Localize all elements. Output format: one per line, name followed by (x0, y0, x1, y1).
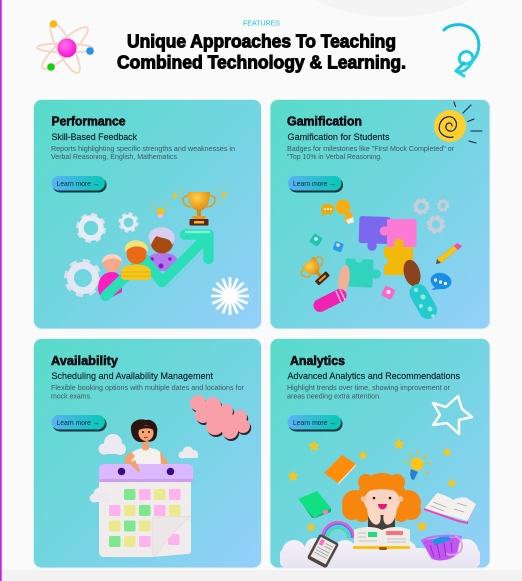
icon: large gear (66, 262, 100, 294)
calendar body (99, 478, 191, 557)
gold stars (288, 439, 456, 530)
icon: white star outline (433, 396, 472, 434)
heading: Availability (51, 354, 118, 368)
calendar (99, 464, 193, 557)
icon: badges (309, 233, 396, 300)
button: learn more: Learn more → (56, 418, 100, 427)
icon: trophy on its side (298, 253, 334, 289)
page fold (152, 516, 191, 556)
puzzle: pink piece (380, 219, 416, 247)
person: yellow (121, 240, 151, 280)
description (287, 383, 451, 400)
button: learn more (288, 415, 342, 432)
hands (365, 502, 399, 526)
description: areas needing extra attention. (287, 392, 381, 400)
button: learn more: Learn more → (56, 179, 100, 188)
panel: gamification (270, 100, 490, 329)
decorative top circle (293, 0, 493, 17)
person: purple (147, 227, 177, 271)
description: Badges for milestones like "First Mock Completed" or (287, 144, 455, 153)
icon: green book (298, 491, 331, 518)
body (368, 515, 395, 530)
puzzle: yellow piece (380, 239, 413, 275)
description (287, 144, 455, 161)
title (117, 32, 406, 72)
face (364, 487, 400, 515)
description: Highlight trends over time, showing improvement or (287, 383, 451, 392)
icon: medium gear (78, 215, 104, 241)
button: learn more (52, 415, 106, 432)
description (51, 144, 235, 161)
subheading: Scheduling and Availability Management (52, 371, 213, 381)
icon: lightbulb (151, 202, 170, 218)
card background (34, 100, 262, 329)
right hand with dotted sleeve (401, 258, 435, 318)
icon: gears (414, 200, 448, 232)
title: Unique Approaches To Teaching (127, 32, 396, 52)
heading: Analytics (290, 354, 345, 368)
left purple edge (0, 0, 2, 581)
button: learn more (288, 176, 343, 192)
card background (34, 338, 262, 568)
heading: Gamification (287, 114, 362, 128)
icon: pink cloud (190, 395, 251, 441)
person: pink (98, 254, 122, 300)
subheading: Skill-Based Feedback (52, 132, 137, 142)
panel: analytics (270, 338, 490, 569)
icon: rainbow (322, 522, 354, 538)
icon: bulb (336, 200, 354, 224)
description: Reports highlighting specific strengths and weaknesses in (51, 144, 235, 153)
puzzle: teal piece (344, 254, 381, 288)
card background (270, 100, 490, 329)
puzzle: purple piece (359, 216, 390, 251)
icon: orange book (324, 455, 356, 485)
description: mock exams. (51, 392, 92, 400)
icon: trophy (170, 187, 229, 226)
panel: performance (34, 100, 262, 329)
icon: open book right (424, 493, 476, 524)
icon: blue chat bubble (429, 271, 453, 291)
icon: yellow chat bubble (321, 204, 334, 216)
open book center (353, 527, 410, 550)
icon: spiral sun (434, 102, 482, 143)
icon: atom (37, 20, 94, 76)
header (37, 20, 479, 76)
icon: small gear (120, 214, 137, 231)
calendar header (99, 464, 193, 482)
icon: pencil (436, 243, 462, 264)
calendar date cells (109, 489, 180, 547)
button: learn more (52, 176, 106, 192)
hand pointing (129, 460, 140, 473)
bottom strip (0, 570, 522, 581)
clouds (90, 434, 198, 502)
description (51, 383, 245, 400)
hair (342, 473, 421, 522)
girl (342, 473, 421, 530)
title: Combined Technology & Learning. (117, 52, 406, 72)
panel: availability (34, 338, 262, 568)
subheading: Advanced Analytics and Recommendations (288, 371, 460, 381)
description: Flexible booking options with multiple dates and locations for (51, 383, 245, 392)
button: learn more: Learn more → (293, 418, 336, 427)
card background (270, 338, 490, 568)
person behind calendar (125, 419, 169, 475)
icon: spiral arrow (444, 25, 479, 76)
heading: Performance (52, 114, 126, 128)
chart arrow (106, 232, 209, 296)
icon: tablet (307, 533, 339, 569)
icon: white burst (211, 277, 249, 315)
subheading: Gamification for Students (288, 132, 390, 142)
icon: bulb with rays (404, 450, 431, 480)
left hand with pink sleeve (320, 264, 351, 306)
cloud base (280, 538, 480, 568)
eyebrow label: FEATURES (243, 20, 280, 28)
icon: purple basket (421, 534, 462, 561)
button: learn more: Learn more → (293, 179, 336, 188)
description: "Top 10% in Verbal Reasoning. (287, 152, 382, 161)
description: Verbal Reasoning, English, Mathematics (51, 152, 177, 161)
